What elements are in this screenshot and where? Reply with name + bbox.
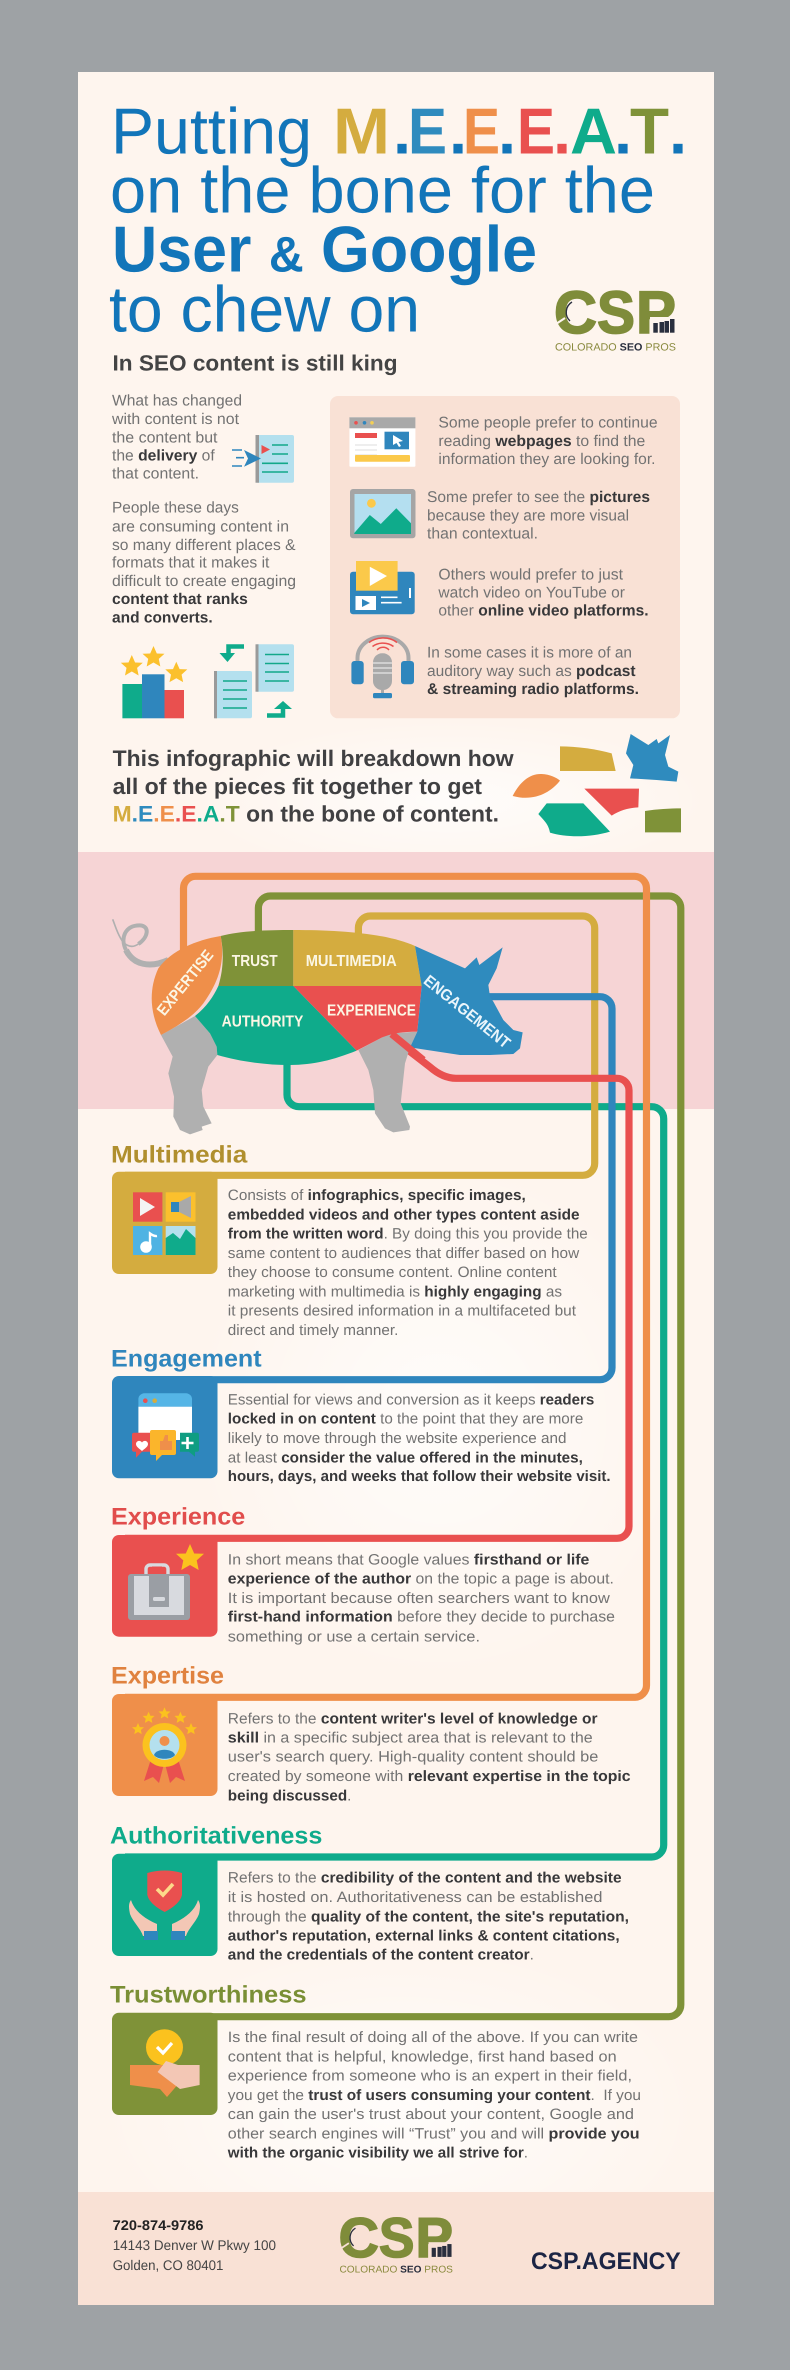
contact details: 14143 Denver W Pkwy 100 <box>113 2237 276 2253</box>
intro text: people these days: difficult to create engaging <box>112 573 296 590</box>
title: Putting <box>111 94 312 167</box>
body text: embedded videos and other types content aside <box>228 1206 580 1223</box>
body text: direct and timely manner. <box>228 1322 398 1339</box>
heading: Multimedia <box>111 1142 248 1169</box>
body text: being discussed. <box>228 1787 351 1804</box>
text: pictures: because they are more visual <box>427 507 629 524</box>
section: Multimedia <box>111 1142 588 1339</box>
title: . <box>553 94 571 167</box>
title: on the bone for the <box>110 154 655 227</box>
intro text: what has changed: the delivery of <box>112 447 215 464</box>
title: . <box>614 94 632 167</box>
heading: Authoritativeness <box>110 1822 322 1849</box>
body text <box>227 2029 641 2162</box>
intro text: people these days: People these days <box>112 500 239 517</box>
pig label: authority: AUTHORITY <box>222 1014 304 1031</box>
body text: with the organic visibility we all strive for. <box>227 2145 528 2162</box>
intro text: what has changed: the content but <box>112 429 218 446</box>
section: Expertise <box>111 1663 631 1804</box>
intro text: people these days <box>112 500 296 626</box>
icon box: handshake <box>112 2013 218 2115</box>
body text: Essential for views and conversion as it keeps readers <box>228 1391 594 1408</box>
pig label: expertise: EXPERTISE <box>154 947 217 1019</box>
icon: podcast <box>351 637 414 698</box>
section: Experience <box>111 1503 615 1645</box>
text: video <box>437 566 649 620</box>
callout: infographic breakdown: M.E.E.E.A.T on the bone of content. <box>113 802 499 827</box>
body text <box>228 1870 629 1964</box>
footer logo: P <box>415 2207 453 2269</box>
intro text: what has changed: What has changed <box>112 393 242 410</box>
text: video: other online video platforms. <box>438 603 649 620</box>
connector lines <box>125 876 681 2017</box>
logo: Colorado SEO Pros: COLORADO SEO PROS <box>555 342 676 354</box>
icon: picture <box>350 489 416 538</box>
footer <box>78 2192 714 2305</box>
text: pictures: Some prefer to see the pictures <box>427 489 650 506</box>
footer logo: COLORADO SEO PROS <box>340 2264 453 2275</box>
intro text: people these days: are consuming content in <box>112 519 289 536</box>
heading: Expertise <box>111 1663 224 1690</box>
icon: star rankings bar chart <box>121 646 187 718</box>
body text: can gain the user's trust about your content, Google and <box>228 2106 634 2123</box>
contact details: Golden, CO 80401 <box>113 2257 224 2273</box>
callout: infographic breakdown <box>113 746 514 827</box>
pig label: multimedia: MULTIMEDIA <box>306 953 397 970</box>
body text: other search engines will “Trust” you and will provide you <box>228 2125 640 2142</box>
text: pictures: than contextual. <box>427 525 538 542</box>
body text: In short means that Google values firsthand or life <box>228 1551 589 1568</box>
text: webpages: Some people prefer to continue <box>438 415 658 432</box>
callout: infographic breakdown: This infographic will breakdown how <box>113 746 514 771</box>
body text: author's reputation, external links & content citations, <box>228 1928 620 1945</box>
icon: video <box>350 561 415 614</box>
title: A <box>570 94 617 167</box>
title: M <box>333 94 390 167</box>
body text: you get the trust of users consuming your content . If you <box>228 2087 641 2104</box>
pig label: trust: TRUST <box>232 953 278 970</box>
icon: scattered pig pieces <box>513 734 681 836</box>
intro text: what has changed <box>111 393 242 483</box>
body text <box>228 1551 615 1645</box>
title: User & Google <box>112 213 537 286</box>
text: video: Others would prefer to just <box>438 566 624 583</box>
body text: Consists of infographics, specific images, <box>228 1187 526 1204</box>
intro text: people these days: and converts. <box>112 609 213 626</box>
body text: experience from someone who is an expert in their field, <box>228 2068 632 2085</box>
icon: swapping documents <box>214 644 294 718</box>
icon: webpage <box>349 417 415 467</box>
section: Engagement <box>111 1346 611 1485</box>
footer logo: C <box>339 2207 379 2269</box>
pig label: experience: EXPERIENCE <box>327 1003 416 1020</box>
contact details <box>113 2217 276 2273</box>
text: podcast <box>427 645 639 698</box>
section: Trustworthiness <box>110 1982 641 2162</box>
intro text: people these days: formats that it makes it <box>112 554 270 571</box>
body text: something or use a certain service. <box>228 1628 480 1645</box>
logo: Colorado SEO Pros: C <box>554 279 597 346</box>
intro text: people these days: content that ranks <box>112 591 248 608</box>
logo: Colorado SEO Pros: P <box>636 279 676 346</box>
title: . <box>498 94 516 167</box>
title: E <box>463 94 500 167</box>
body text <box>228 1391 611 1485</box>
footer logo <box>339 2207 454 2275</box>
pig label: engagement: ENGAGEMENT <box>420 972 513 1052</box>
callout: infographic breakdown: all of the pieces fit together to get <box>113 774 483 799</box>
pig silhouette: pieces <box>113 919 523 1134</box>
body text <box>228 1187 588 1339</box>
title: to chew on <box>109 273 420 346</box>
body text <box>228 1710 631 1804</box>
body text: they choose to consume content. Online content <box>228 1264 558 1281</box>
heading: Engagement <box>111 1346 262 1373</box>
pig diagram <box>113 919 523 1134</box>
text: webpages <box>438 415 658 468</box>
icon box: window with reactions <box>112 1376 218 1478</box>
subheading: In SEO content is still king <box>112 350 398 376</box>
body text: and the credentials of the content creator . <box>228 1947 534 1964</box>
text: pictures <box>427 489 650 542</box>
body text: experience of the author on the topic a page is about. <box>228 1571 614 1588</box>
body text: likely to move through the website experience and <box>228 1430 567 1447</box>
body text: first-hand information before they decide to purchase <box>228 1609 615 1626</box>
text: webpages: reading webpages to find the <box>438 433 645 450</box>
body text: skill in a specific subject area that is relevant to the <box>228 1730 593 1747</box>
pink band behind pig <box>78 852 714 1109</box>
body text: hours, days, and weeks that follow their website visit. <box>228 1468 611 1485</box>
icon box: media tiles <box>112 1172 218 1274</box>
text: webpages: information they are looking for. <box>438 451 656 468</box>
title <box>109 94 687 346</box>
footer logo: S <box>379 2207 415 2269</box>
body text: same content to audiences that differ based on how <box>228 1245 579 1262</box>
section: Authoritativeness <box>110 1822 629 1964</box>
title: E <box>408 94 447 167</box>
heading: Trustworthiness <box>110 1982 306 2009</box>
title: . <box>393 94 411 167</box>
body text: Refers to the content writer's level of knowledge or <box>228 1710 598 1727</box>
website: CSP.AGENCY <box>531 2248 681 2275</box>
title: T <box>630 94 669 167</box>
text: podcast: In some cases it is more of an <box>427 645 632 662</box>
panel: content formats <box>330 396 680 718</box>
body text: marketing with multimedia is highly engaging as <box>228 1283 562 1300</box>
intro text: people these days: so many different places & <box>112 537 296 554</box>
text: video: watch video on YouTube or <box>437 584 625 601</box>
intro text: what has changed: that content. <box>112 466 199 483</box>
heading: Experience <box>111 1503 245 1530</box>
body text: through the quality of the content, the site's reputation, <box>228 1908 629 1925</box>
body text: content that is helpful, knowledge, first hand based on <box>228 2048 617 2065</box>
icon box: award badge <box>112 1694 218 1796</box>
text: podcast: auditory way such as podcast <box>427 663 636 680</box>
title: E <box>517 94 555 167</box>
body text: at least consider the value offered in the minutes, <box>228 1449 583 1466</box>
logo: Colorado SEO Pros <box>554 279 677 354</box>
body text: it presents desired information in a multifaceted but <box>228 1303 577 1320</box>
body text: created by someone with relevant expertise in the topic <box>228 1768 631 1785</box>
icon: content delivery <box>232 435 294 483</box>
body text: locked in on content to the point that they are more <box>228 1411 583 1428</box>
body text: Refers to the credibility of the content and the website <box>228 1870 622 1887</box>
icon box: shield and hands <box>112 1854 218 1956</box>
title: . <box>449 94 467 167</box>
body text: Is the final result of doing all of the above. If you can write <box>228 2029 638 2046</box>
body text: from the written word. By doing this you provide the <box>228 1226 588 1243</box>
body text: It is important because often searchers want to know <box>228 1590 610 1607</box>
infographic canvas <box>78 72 714 2305</box>
text: podcast: & streaming radio platforms. <box>427 681 639 698</box>
body text: user's search query. High-quality content should be <box>228 1749 598 1766</box>
intro text: what has changed: with content is not <box>111 411 240 428</box>
title: . <box>669 94 687 167</box>
icon box: briefcase and star <box>112 1535 218 1637</box>
contact details: 720-874-9786 <box>113 2217 204 2233</box>
logo: Colorado SEO Pros: S <box>597 279 635 346</box>
body text: it is hosted on. Authoritativeness can be established <box>228 1889 602 1906</box>
